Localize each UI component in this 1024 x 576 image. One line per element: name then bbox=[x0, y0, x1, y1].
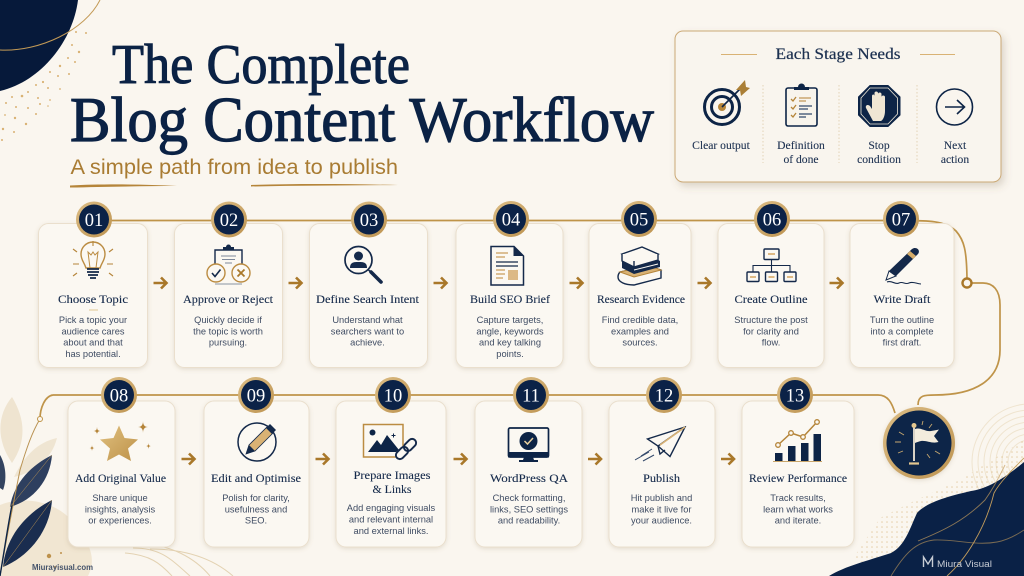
step description bbox=[331, 315, 404, 348]
number badges: 08 bbox=[110, 386, 128, 406]
number badges: 03 bbox=[360, 211, 378, 231]
number badges: 13 bbox=[786, 386, 804, 406]
step title: & Links bbox=[372, 482, 412, 496]
step title: Add Original Value bbox=[75, 471, 166, 485]
step title: Review Performance bbox=[749, 471, 847, 485]
step description bbox=[631, 493, 692, 526]
step description: your audience. bbox=[631, 516, 692, 526]
step description bbox=[763, 493, 833, 526]
step description: Structure the post bbox=[734, 315, 808, 325]
step description: about and that bbox=[63, 338, 123, 348]
step description: links, SEO settings bbox=[490, 504, 568, 514]
step description: Track results, bbox=[770, 493, 826, 503]
step description: into a complete bbox=[870, 326, 934, 336]
step description bbox=[85, 493, 155, 526]
step title: Create Outline bbox=[734, 292, 808, 306]
step description: Quickly decide if bbox=[194, 315, 262, 325]
step 05 card bbox=[589, 224, 691, 368]
step description bbox=[222, 493, 290, 526]
panel labels: Definition bbox=[777, 139, 825, 152]
step 09 card bbox=[204, 401, 309, 547]
decoration: bottom-left leaves and wash bbox=[0, 397, 233, 576]
icon: stack of books bbox=[618, 247, 661, 285]
step description: and iterate. bbox=[775, 516, 821, 526]
icon: outline hierarchy bbox=[747, 249, 796, 282]
title bbox=[70, 34, 654, 155]
icon: pencil in circle bbox=[238, 423, 276, 461]
icon: performance chart bbox=[773, 420, 822, 462]
icon: image and link bbox=[364, 424, 418, 461]
number badges: 11 bbox=[522, 386, 540, 406]
icon: star and sparkles bbox=[90, 421, 151, 461]
step description: examples and bbox=[611, 326, 669, 336]
decoration: bottom-right navy wave bbox=[829, 404, 1024, 576]
watermark: website: Miurayisual.com bbox=[32, 563, 93, 572]
icon: search person bbox=[345, 246, 381, 282]
icon: monitor check bbox=[508, 428, 549, 462]
step description: insights, analysis bbox=[85, 504, 155, 514]
step description: or experiences. bbox=[88, 516, 152, 526]
step 03 card bbox=[310, 224, 428, 368]
panel labels: action bbox=[941, 153, 969, 166]
step description: Capture targets, bbox=[477, 315, 543, 325]
title: Blog Content Workflow bbox=[70, 85, 654, 155]
icon: SEO brief document bbox=[491, 246, 524, 285]
step 11 card bbox=[475, 401, 582, 547]
step description: Share unique bbox=[92, 493, 148, 503]
icon: stop hand bbox=[858, 86, 900, 126]
step 02 card bbox=[174, 224, 282, 368]
step title: Prepare Images bbox=[354, 468, 431, 482]
step description: Polish for clarity, bbox=[222, 493, 290, 503]
step description: Find credible data, bbox=[602, 315, 678, 325]
decoration: top-left navy shape bbox=[0, 0, 100, 141]
panel labels: Next bbox=[944, 139, 967, 152]
step description bbox=[193, 315, 263, 348]
number badges: 07 bbox=[892, 210, 910, 230]
step description: Turn the outline bbox=[870, 315, 934, 325]
watermark: brand bbox=[924, 557, 992, 570]
number badges: 10 bbox=[384, 386, 402, 406]
panel labels: Clear output bbox=[692, 139, 751, 152]
step description: and key talking bbox=[479, 338, 541, 348]
step description: flow. bbox=[762, 338, 780, 348]
number badges: 09 bbox=[247, 386, 265, 406]
step title: Build SEO Brief bbox=[470, 292, 550, 306]
step description: Pick a topic your bbox=[59, 315, 127, 325]
step description: SEO. bbox=[245, 516, 267, 526]
step description: learn what works bbox=[763, 504, 833, 514]
step description: make it live for bbox=[632, 504, 691, 514]
step title: Approve or Reject bbox=[183, 292, 274, 306]
step description bbox=[870, 315, 934, 348]
step 01 card bbox=[38, 224, 148, 368]
step description bbox=[490, 493, 568, 526]
step description: searchers want to bbox=[331, 326, 404, 336]
step 06 card bbox=[718, 224, 824, 368]
step description bbox=[59, 315, 127, 359]
step title: Publish bbox=[643, 471, 680, 485]
step description: pursuing. bbox=[209, 338, 247, 348]
step description: and readability. bbox=[498, 516, 560, 526]
number badges: 05 bbox=[630, 210, 648, 230]
step 04 card bbox=[456, 224, 563, 368]
number badges: 06 bbox=[763, 210, 781, 230]
panel heading: Each Stage Needs bbox=[776, 46, 900, 63]
step title: Choose Topic bbox=[58, 292, 128, 306]
panel labels bbox=[692, 139, 969, 166]
icon: target bbox=[704, 80, 750, 124]
step description: and relevant internal bbox=[349, 514, 433, 524]
step title: Research Evidence bbox=[597, 292, 685, 306]
step title: Define Search Intent bbox=[316, 292, 420, 306]
step description: Understand what bbox=[332, 315, 403, 325]
step description bbox=[734, 315, 808, 348]
step arrows bbox=[154, 278, 842, 464]
step title: Write Draft bbox=[874, 292, 931, 306]
step description bbox=[476, 315, 544, 359]
step description: has potential. bbox=[65, 349, 121, 359]
step description: audience cares bbox=[61, 326, 125, 336]
icon: light bulb bbox=[73, 241, 113, 278]
step description: Add engaging visuals bbox=[347, 503, 436, 513]
step description: the topic is worth bbox=[193, 326, 263, 336]
step 08 card bbox=[68, 401, 175, 547]
step 07 card bbox=[850, 224, 954, 368]
step description: Hit publish and bbox=[631, 493, 692, 503]
step description: usefulness and bbox=[225, 504, 287, 514]
icon: approve or reject bbox=[207, 244, 250, 284]
step description: achieve. bbox=[350, 338, 385, 348]
watermark: brand: Miura Visual bbox=[937, 559, 992, 570]
step description: first draft. bbox=[883, 338, 921, 348]
icon: clipboard checklist bbox=[786, 84, 817, 126]
panel labels: of done bbox=[783, 153, 819, 166]
step description: sources. bbox=[622, 338, 658, 348]
step description bbox=[602, 315, 678, 348]
icon: pen and squiggle bbox=[886, 248, 921, 284]
finish flag badge bbox=[883, 407, 955, 479]
step 10 card bbox=[336, 401, 446, 547]
number badges bbox=[76, 201, 919, 413]
title: The Complete bbox=[112, 34, 410, 96]
panel labels: Stop bbox=[868, 139, 890, 152]
number badges: 02 bbox=[220, 211, 238, 231]
step 12 card bbox=[609, 401, 715, 547]
step description: points. bbox=[496, 349, 524, 359]
workflow connector path bbox=[38, 220, 1000, 422]
step title bbox=[354, 468, 431, 496]
step description: for clarity and bbox=[743, 326, 799, 336]
step description bbox=[347, 503, 436, 536]
subtitle: A simple path from idea to publish bbox=[70, 156, 398, 179]
number badges: 12 bbox=[655, 386, 673, 406]
number badges: 04 bbox=[502, 210, 520, 230]
panel: each stage needs bbox=[675, 31, 1001, 182]
step description: and external links. bbox=[354, 526, 428, 536]
icon: next arrow bbox=[936, 89, 972, 125]
step title: WordPress QA bbox=[490, 471, 568, 485]
number badges: 01 bbox=[85, 211, 103, 231]
step 13 card bbox=[742, 401, 854, 547]
step title: Edit and Optimise bbox=[211, 471, 301, 485]
panel labels: condition bbox=[857, 153, 901, 166]
icon: paper plane bbox=[635, 427, 685, 461]
step description: Check formatting, bbox=[493, 493, 565, 503]
step description: angle, keywords bbox=[476, 326, 544, 336]
